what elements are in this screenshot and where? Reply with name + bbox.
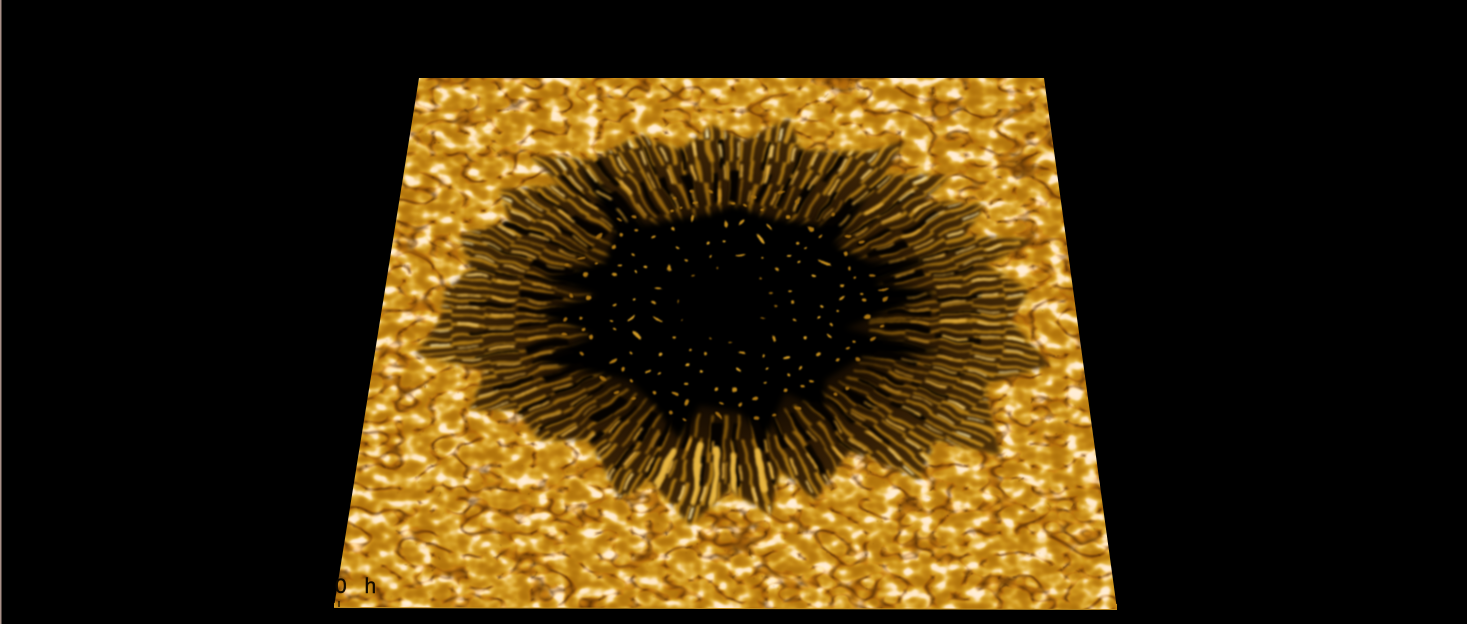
penumbra mid filaments xyxy=(430,125,1026,519)
umbra dark core xyxy=(535,165,945,440)
time label: 0 h xyxy=(335,575,382,598)
solar surface plane xyxy=(334,78,1117,610)
granulation xyxy=(334,78,1117,609)
sunspot umbra xyxy=(438,131,1018,513)
sunspot penumbra xyxy=(412,116,1052,528)
penumbra base xyxy=(413,116,1052,528)
sunspot scene xyxy=(0,0,1117,624)
jagged dark lanes at umbra edge xyxy=(490,152,960,472)
umbral dots xyxy=(565,190,885,420)
bright lower streaks xyxy=(658,445,765,505)
left edge stripe xyxy=(0,0,2,624)
plane side edge xyxy=(334,603,1117,610)
small label mark xyxy=(338,601,340,607)
bright penumbral streaks xyxy=(438,131,1018,513)
